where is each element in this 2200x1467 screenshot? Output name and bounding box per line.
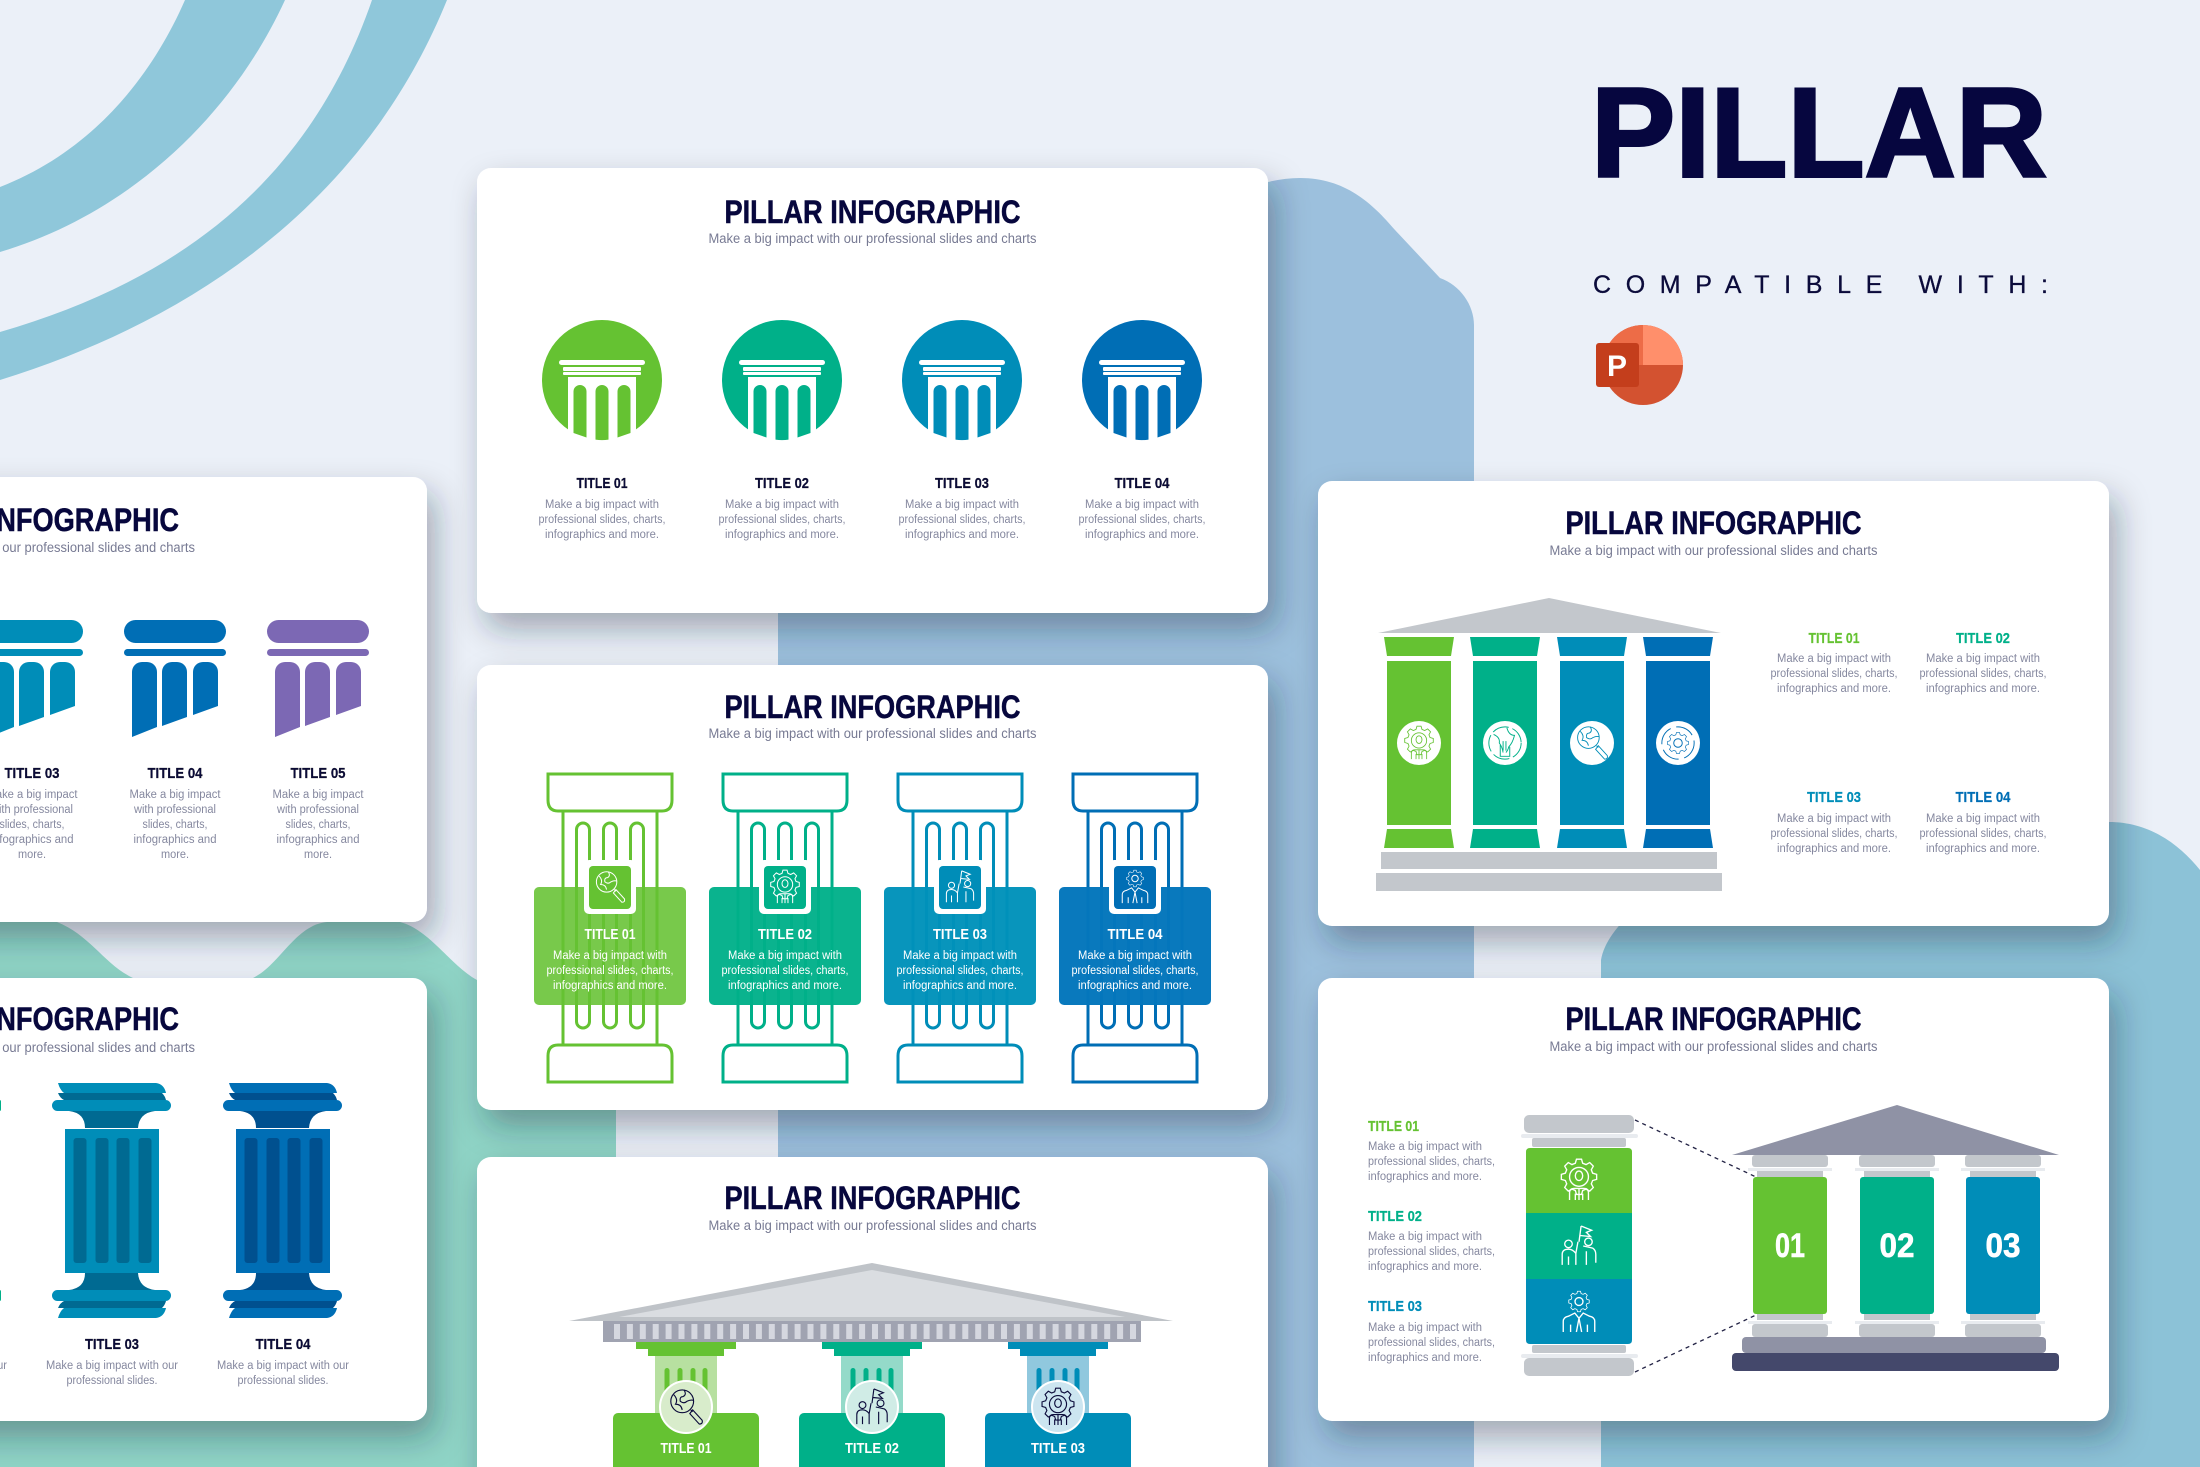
item: title 01: professional slides, charts, xyxy=(538,514,666,526)
item: title 02: Make a big impact with xyxy=(725,499,839,511)
heading: PILLAR INFOGRAPHIC xyxy=(1566,1001,1862,1037)
item: title 05: with professional xyxy=(276,804,359,816)
item: title 04: TITLE 04 xyxy=(148,765,203,782)
item: title 03 xyxy=(898,320,1026,541)
item: title 05: more. xyxy=(304,849,332,861)
item: title 01: Make a big impact with xyxy=(545,499,659,511)
text: title 02: TITLE 02 xyxy=(1956,630,2010,647)
text: title 02: infographics and more. xyxy=(1926,683,2040,695)
item: title 04: slides, charts, xyxy=(142,819,208,831)
icon: PowerPoint logo: P xyxy=(1607,350,1627,383)
temple illustration: 02 xyxy=(1880,1227,1914,1265)
item: title 04: TITLE 04 xyxy=(1114,475,1170,492)
text: title 01: TITLE 01 xyxy=(1808,630,1860,647)
text: title 03: professional slides, charts, xyxy=(1770,828,1898,840)
item: title 05: Make a big impact xyxy=(272,789,364,801)
item: title 02: TITLE 02 xyxy=(755,475,809,492)
temple roof xyxy=(569,1263,1173,1342)
background blob: mint left xyxy=(0,922,616,1467)
item: title 03: TITLE 03 xyxy=(933,926,987,943)
text: title 03 xyxy=(1368,1298,1495,1364)
text: title 01: infographics and more. xyxy=(1368,1171,1482,1183)
item: title 04 xyxy=(1059,774,1211,1082)
item: title 04 xyxy=(1078,320,1206,541)
item: title 03: Make a big impact with xyxy=(905,499,1019,511)
text: title 02: professional slides, charts, xyxy=(1368,1246,1495,1258)
item: title 01 xyxy=(534,774,686,1082)
item: title 02: infographics and more. xyxy=(725,529,839,541)
item: title 02 xyxy=(709,774,861,1082)
item: title 03: infographics and more. xyxy=(905,529,1019,541)
text: title 01 xyxy=(1368,1118,1495,1183)
decorative arcs top left xyxy=(0,0,447,380)
item: title 04: TITLE 04 xyxy=(1108,926,1163,943)
panel: left top slide, capitals xyxy=(0,477,427,922)
heading: PILLAR INFOGRAPHIC xyxy=(1566,505,1862,541)
temple illustration xyxy=(1376,598,1722,891)
item: title 02 xyxy=(718,320,846,541)
subheading: Make a big impact with our professional slides and charts xyxy=(1550,1039,1878,1054)
item: title 01: infographics and more. xyxy=(553,980,667,992)
subheading: Make a big impact with our professional slides and charts xyxy=(708,231,1037,246)
item: title 02: professional slides, charts, xyxy=(722,965,848,977)
item: title 03 xyxy=(46,1083,178,1387)
text: title 03: Make a big impact with xyxy=(1777,813,1891,825)
panel: centre bottom slide, temple xyxy=(477,1157,1268,1467)
text: title 04: TITLE 04 xyxy=(1956,789,2011,806)
temple illustration xyxy=(1732,1105,2059,1371)
item: title 01 xyxy=(538,320,666,541)
item: title 01 xyxy=(613,1342,759,1467)
item: title 01: TITLE 01 xyxy=(576,475,628,492)
item: title 02: professional slides, charts, xyxy=(718,514,846,526)
item: title 03: Make a big impact with our xyxy=(46,1360,178,1372)
icon: PowerPoint logo xyxy=(1596,325,1683,405)
text: title 02: professional slides, charts, xyxy=(1920,668,2046,680)
item: title 04: Make a big impact with our xyxy=(217,1360,349,1372)
item: title 04: infographics and xyxy=(134,834,216,846)
item: title 03: infographics and more. xyxy=(903,980,1017,992)
text: title 02: infographics and more. xyxy=(1368,1261,1482,1273)
panel: right top slide, four columns xyxy=(1318,481,2109,926)
item: title 04: Make a big impact xyxy=(130,789,221,801)
text: title 01: professional slides, charts, xyxy=(1770,668,1898,680)
background blob: light blue right xyxy=(1601,822,2200,1467)
text: title 02: TITLE 02 xyxy=(1368,1208,1422,1225)
item: title 03: professional slides, charts, xyxy=(898,514,1026,526)
text: title 02: Make a big impact with xyxy=(1926,653,2040,665)
item: title 03: Make a big impact with xyxy=(903,950,1017,962)
item: title 02: TITLE 02 xyxy=(845,1440,899,1457)
text: title 03: TITLE 03 xyxy=(1807,789,1861,806)
text: title 04: infographics and more. xyxy=(1926,843,2040,855)
item: title 04 xyxy=(217,1083,349,1387)
item: title 03: professional slides, charts, xyxy=(896,965,1024,977)
item: title 03: TITLE 03 xyxy=(85,1336,139,1353)
item: title 04: more. xyxy=(161,849,189,861)
text: title 01: TITLE 01 xyxy=(1368,1118,1419,1135)
text: title 02: Make a big impact with xyxy=(1368,1231,1482,1243)
item: title 01: infographics and more. xyxy=(545,529,659,541)
item: title 03: slides, charts, xyxy=(0,819,64,831)
item: title 02 xyxy=(0,1100,7,1372)
text: title 03: infographics and more. xyxy=(1368,1352,1482,1364)
item: title 04: professional slides, charts, xyxy=(1072,965,1198,977)
text: title 03: Make a big impact with xyxy=(1368,1322,1482,1334)
background blob: blue xyxy=(778,178,1474,1467)
item: title 04: Make a big impact with xyxy=(1078,950,1192,962)
panel: right bottom slide, zoomed pillar and temple xyxy=(1318,978,2109,1421)
item: title 04: infographics and more. xyxy=(1085,529,1199,541)
temple illustration: 01 xyxy=(1775,1227,1805,1265)
item: title 05: TITLE 05 xyxy=(290,765,346,782)
item: title 04: TITLE 04 xyxy=(256,1336,311,1353)
label: compatible with: COMPATIBLE WITH: xyxy=(1593,271,2048,299)
item: title 03 xyxy=(884,774,1036,1082)
text: title 03: TITLE 03 xyxy=(1368,1298,1422,1315)
text: title 04: professional slides, charts, xyxy=(1920,828,2046,840)
item: title 02 xyxy=(799,1342,945,1467)
subheading: Make a big impact with our professional slides and charts xyxy=(708,726,1037,741)
text: title 01: professional slides, charts, xyxy=(1368,1156,1495,1168)
text: title 01: Make a big impact with xyxy=(1777,653,1891,665)
text: title 03 xyxy=(1770,789,1898,855)
subheading: Make a big impact with our professional slides and charts xyxy=(1550,543,1878,558)
subheading: Make a big impact with our professional slides and charts xyxy=(708,1218,1037,1233)
heading: PILLAR INFOGRAPHIC xyxy=(724,194,1020,230)
item: title 01: professional slides, charts, xyxy=(546,965,674,977)
item: title 04: professional slides. xyxy=(238,1375,328,1387)
text: title 04: Make a big impact with xyxy=(1926,813,2040,825)
text: title 01: infographics and more. xyxy=(1777,683,1891,695)
item: title 03 xyxy=(985,1342,1131,1467)
text: title 03: professional slides, charts, xyxy=(1368,1337,1495,1349)
item: title 01: TITLE 01 xyxy=(584,926,636,943)
item: title 04: professional slides, charts, xyxy=(1078,514,1206,526)
item: title 02: Make a big impact with xyxy=(728,950,842,962)
item: title 03 xyxy=(0,620,83,861)
dashed connector lines xyxy=(1635,1120,1756,1372)
item: title 04: infographics and more. xyxy=(1078,980,1192,992)
item: title 01: Make a big impact with xyxy=(553,950,667,962)
item: title 03: TITLE 03 xyxy=(4,765,60,782)
temple illustration: 03 xyxy=(1986,1227,2020,1265)
item: title 05 xyxy=(267,620,369,861)
panel: centre top slide, circles xyxy=(477,168,1268,613)
enlarged pillar xyxy=(1521,1115,1638,1376)
text: title 01 xyxy=(1770,630,1898,695)
item: title 02: infographics and more. xyxy=(728,980,842,992)
text: title 03: infographics and more. xyxy=(1777,843,1891,855)
item: title 05: slides, charts, xyxy=(286,819,350,831)
item: title 03: more. xyxy=(18,849,46,861)
item: title 04: with professional xyxy=(133,804,216,816)
heading: PILLAR INFOGRAPHIC xyxy=(724,1180,1020,1216)
title: PILLAR: PILLAR xyxy=(1591,62,2047,204)
item: title 02: TITLE 02 xyxy=(758,926,812,943)
heading: PILLAR INFOGRAPHIC xyxy=(724,689,1020,725)
item: title 03: TITLE 03 xyxy=(1031,1440,1085,1457)
item: title 04: Make a big impact with xyxy=(1085,499,1199,511)
item: title 01: TITLE 01 xyxy=(660,1440,712,1457)
text: title 02 xyxy=(1920,630,2046,695)
item: title 03: TITLE 03 xyxy=(935,475,989,492)
text: title 02 xyxy=(1368,1208,1495,1273)
text: title 04 xyxy=(1920,789,2046,855)
text: title 01: Make a big impact with xyxy=(1368,1141,1482,1153)
item: title 04 xyxy=(124,620,226,861)
panel: centre middle slide, outline pillars xyxy=(477,665,1268,1110)
item: title 03: professional slides. xyxy=(66,1375,158,1387)
item: title 05: infographics and xyxy=(276,834,360,846)
panel: left bottom slide, columns xyxy=(0,978,427,1421)
